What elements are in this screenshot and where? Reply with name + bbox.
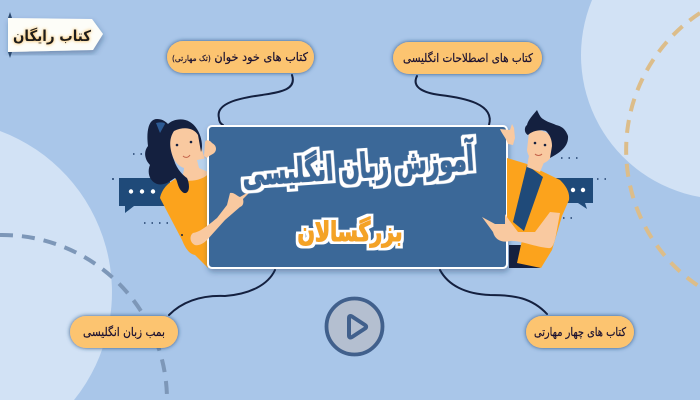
tag: free book: کتاب رایگان <box>13 27 91 45</box>
pill: English bomb: بمب زبان انگلیسی <box>83 325 165 340</box>
pill: self-study books <box>167 41 314 73</box>
play button <box>326 298 382 354</box>
background circle: top right <box>581 0 700 287</box>
pill: English bomb <box>70 316 178 348</box>
man pointing arm <box>482 212 560 248</box>
subtitle: بزرگسالان <box>298 216 402 248</box>
background circle: bottom left <box>0 131 167 400</box>
character: woman <box>145 119 210 268</box>
pill: self-study books: کتاب های خود خوان (تک مهارتی) <box>172 50 308 65</box>
character: man <box>507 110 569 268</box>
title: آموزش زبان انگلیسی <box>241 137 476 195</box>
woman hand on top of board <box>204 140 216 158</box>
woman pointing arm <box>191 190 252 245</box>
speech bubble: left <box>112 154 170 223</box>
pill: idiom books: کتاب های اصطلاحات انگلیسی <box>403 51 533 65</box>
pill: four-skill books <box>526 316 634 348</box>
man hand on top of board <box>500 124 515 145</box>
speech bubble: right <box>550 158 606 218</box>
central board <box>208 126 507 268</box>
pill: four-skill books: کتاب های چهار مهارتی <box>534 325 626 340</box>
connector lines <box>169 75 547 315</box>
tag: free book <box>8 12 103 58</box>
pill: idiom books <box>393 42 542 74</box>
